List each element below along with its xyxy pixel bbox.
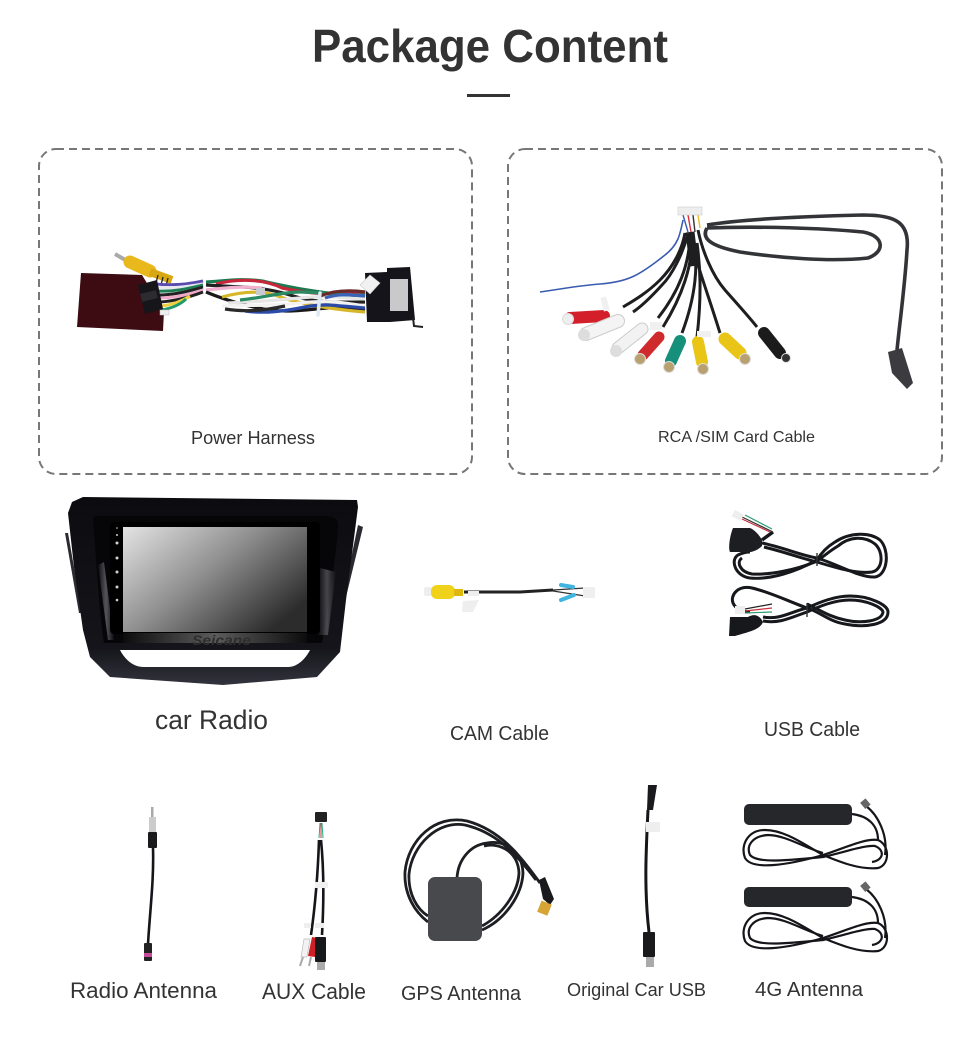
title: Package Content bbox=[312, 20, 668, 72]
icon: car radio head unit: Seicane bbox=[192, 633, 252, 648]
item: CAM cable bbox=[424, 585, 595, 745]
item: original car USB bbox=[567, 785, 706, 1000]
title underline bbox=[467, 94, 510, 97]
label: CAM Cable: CAM Cable bbox=[450, 723, 549, 745]
item: car radio bbox=[65, 497, 363, 735]
label: GPS Antenna: GPS Antenna bbox=[401, 983, 522, 1005]
icon: two USB cables bbox=[729, 510, 888, 636]
item: USB cable bbox=[729, 510, 888, 741]
label: Radio Antenna: Radio Antenna bbox=[70, 978, 218, 1003]
label: USB Cable: USB Cable bbox=[764, 719, 860, 741]
panel: power harness bbox=[39, 149, 472, 474]
icon: CAM cable bbox=[424, 585, 595, 612]
item: AUX cable bbox=[262, 812, 366, 1004]
item: 4G antenna bbox=[744, 798, 887, 1001]
icon: radio antenna bbox=[144, 807, 157, 961]
label: Original Car USB: Original Car USB bbox=[567, 980, 706, 1000]
icon: two 4G antennas bbox=[744, 798, 887, 951]
icon: GPS antenna bbox=[405, 820, 554, 941]
icon: AUX cable bbox=[300, 812, 328, 970]
label: car Radio: car Radio bbox=[155, 705, 268, 735]
icon: car radio head unit bbox=[65, 497, 363, 685]
label: Power Harness: Power Harness bbox=[191, 428, 315, 448]
panel: RCA and SIM card cable bbox=[508, 149, 942, 474]
label: AUX Cable: AUX Cable bbox=[262, 979, 366, 1004]
item: radio antenna bbox=[70, 807, 218, 1003]
label: RCA /SIM Card Cable: RCA /SIM Card Cable bbox=[658, 429, 815, 446]
icon: power harness photo bbox=[77, 254, 423, 331]
item: GPS antenna bbox=[401, 820, 554, 1005]
label: 4G Antenna: 4G Antenna bbox=[755, 979, 864, 1001]
icon: RCA and SIM card cable photo bbox=[540, 207, 913, 389]
icon: original car USB bbox=[643, 785, 660, 967]
